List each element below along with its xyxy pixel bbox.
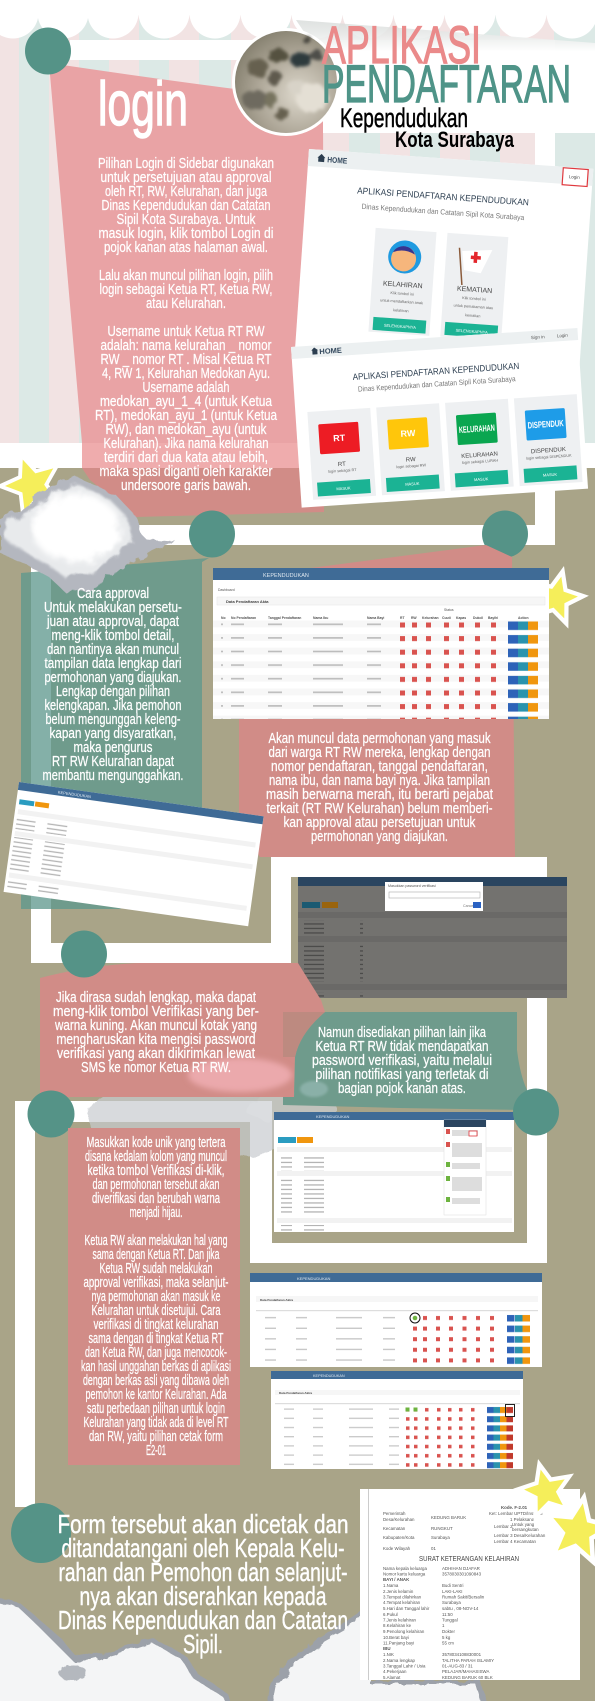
screenshot: surat keterangan kelahiran form: ADHIHAN DJAFAR <box>442 1566 480 1571</box>
text block: cara approval: dan nantinya akan muncul <box>47 641 179 658</box>
screenshot: data pendaftaran table: RT <box>400 616 405 620</box>
text block: masukkan kode: sama dengan di tingkat Ketua RT <box>88 1330 224 1347</box>
screenshot: surat keterangan kelahiran form: 5.Alamat <box>383 1675 401 1680</box>
text block: form dicetak: rahan dan Pemohon dan selanjut- <box>58 1557 348 1587</box>
card: RW: MASUK <box>405 481 420 487</box>
screenshot: surat keterangan kelahiran form: Kode. F-2.01 <box>501 1505 528 1510</box>
screenshot: surat keterangan kelahiran form: 3.Tanggal Lahir / Usia <box>383 1664 426 1668</box>
screenshot: notifikasi dropdown <box>274 1112 514 1232</box>
screenshot: surat keterangan kelahiran form: 2.Jenis kelamin <box>383 1589 414 1594</box>
text block: masukkan kode: verifikasi di tingkat kelurahan <box>94 1316 218 1333</box>
text block: masukkan kode <box>81 1134 231 1459</box>
screenshot: surat keterangan kelahiran form: Lembar 4 Kecamatan <box>494 1539 537 1544</box>
text block: masukkan kode: Masukkan kode unik yang tertera <box>86 1134 226 1151</box>
text block: form dicetak: Sipil. <box>183 1629 223 1659</box>
card: Kelurahan: KELURAHAN <box>461 452 498 460</box>
text block: masukkan kode: disana kedalam kolom yang muncul <box>85 1148 227 1165</box>
text block: form dicetak: Dinas Kependudukan dan Catatan <box>58 1605 348 1635</box>
screenshot: surat keterangan kelahiran form: Desa/Kelurahan <box>383 1517 415 1522</box>
text block: masukkan kode: dan permohonan tersebut akan <box>92 1176 220 1193</box>
text block: masukkan kode: approval verifikasi, maka selanjut- <box>84 1274 228 1291</box>
screenshot: surat keterangan kelahiran form: Budi Sentri <box>442 1583 464 1588</box>
screenshot: surat keterangan kelahiran form: Nomor kartu keluarga <box>383 1572 426 1576</box>
text block: form dicetak: Form tersebut akan dicetak dan <box>58 1509 348 1539</box>
text block: masukkan kode: Ketua RW akan melakukan hal yang <box>84 1232 228 1249</box>
card: Kelurahan: KELURAHAN <box>459 423 495 435</box>
card: Kelurahan: login sebagai LURAH <box>462 459 499 465</box>
screenshot: data pendaftaran table: No <box>221 616 226 620</box>
text block: masukkan kode: E2-01 <box>146 1442 166 1459</box>
text block: login explanation: Username adalah <box>142 379 230 396</box>
text block: form dicetak: nya akan diserahkan kepada <box>80 1581 327 1611</box>
screenshot: login role selection: Login <box>557 333 568 338</box>
text block: data permohonan: terkait (RT RW Kelurahan) belum memberi- <box>266 800 492 817</box>
screenshot: surat keterangan kelahiran form: Surabaya <box>442 1600 461 1605</box>
text block: login explanation: RW), dan medokan_ayu (untuk <box>106 421 267 438</box>
text block: masukkan kode: Kelurahan yang tidak ada di level RT <box>84 1414 228 1431</box>
screenshot: surat keterangan kelahiran form: 2.Nama lengkap <box>383 1658 416 1663</box>
card: RT: RT <box>333 433 346 443</box>
text block: login explanation: adalah: nama kelurahan _ nomor <box>100 337 272 354</box>
panel stripe over white frame <box>31 572 51 909</box>
text block: login explanation: terdiri dari dua kata atau lebih, <box>104 449 268 466</box>
screenshot: surat keterangan kelahiran form: 6.Pukul <box>383 1612 398 1617</box>
screenshot: home page with login button: HOME <box>327 155 348 166</box>
screenshot: data pendaftaran table: Data Pendaftaran Akta <box>226 599 269 604</box>
approved markers and print highlight <box>406 1404 514 1416</box>
star: right <box>519 558 594 631</box>
text block: data permohonan: dari warga RT RW mereka, lengkap dengan <box>268 744 490 761</box>
screenshot: login role selection <box>291 328 588 508</box>
screenshot: data pendaftaran table: Dukcil <box>473 616 483 620</box>
verification dialog: Masukkan password verifikasi <box>388 884 436 888</box>
text block: form dicetak: ditandatangani oleh Kepala Kelu- <box>62 1533 344 1563</box>
card: kematian <box>440 233 508 341</box>
screenshot: data pendaftaran table: Tanggal Pendaftaran <box>268 616 301 620</box>
screenshot: surat keterangan kelahiran form: 3578030301090843 <box>442 1572 482 1576</box>
card: Dispenduk <box>514 394 583 486</box>
text block: cara approval: membantu mengunggahkan. <box>42 767 184 784</box>
text block: notifikasi: Namun disediakan pilihan lain jika <box>318 1024 486 1041</box>
white band <box>0 443 595 468</box>
card: RT: RT <box>338 462 346 468</box>
header poster <box>296 20 595 133</box>
screenshot: data pendaftaran table: RW <box>411 616 417 620</box>
screenshot: surat keterangan kelahiran form: Nama kepala keluarga <box>383 1566 427 1571</box>
white frames <box>15 40 555 1507</box>
screenshot: login role selection: Dinas Kependudukan dan Catatan Sipil Kota Surabaya <box>358 374 517 394</box>
text block: masukkan kode: ketika tombol Verifikasi di-klik, <box>88 1162 224 1179</box>
screenshot: table with first approval <box>250 1273 542 1367</box>
screenshot: surat keterangan kelahiran form: 9.Penolong kelahiran <box>383 1629 425 1634</box>
screenshot: surat keterangan kelahiran form: Kabupaten/Kota <box>383 1535 415 1540</box>
notifikasi overlap on pink panel <box>283 1012 325 1057</box>
text block: masukkan kode: menjadi hijau. <box>130 1204 182 1221</box>
screenshot: surat keterangan kelahiran form: 11.Panjang bayi <box>383 1640 414 1646</box>
screenshot: surat keterangan kelahiran form: SURAT KETERANGAN KELAHIRAN <box>419 1556 519 1563</box>
screenshot: surat keterangan kelahiran form: Kecamatan <box>383 1526 406 1531</box>
screenshot: data pendaftaran table: Nama Ibu <box>313 616 328 620</box>
screenshot: surat keterangan kelahiran form: Kode Wilayah <box>383 1546 411 1551</box>
screenshot: surat keterangan kelahiran form: 8.Kelahiran ke <box>383 1623 412 1628</box>
panel: cara approval <box>21 558 209 909</box>
screenshot: surat keterangan kelahiran form: 5.Hari dan Tanggal lahir <box>383 1606 430 1611</box>
text block: cara approval: tampilan data lengkap dari <box>44 655 182 672</box>
text block: cara approval: meng-klik tombol detail, <box>52 627 174 644</box>
card: kelahiran: kelahiran <box>393 308 409 313</box>
screenshot: surat keterangan kelahiran form: 3578034108830001 <box>442 1652 482 1657</box>
text block: login explanation: pojok kanan atas halaman awal. <box>104 239 268 256</box>
text block: notifikasi: password verifikasi, yaitu melalui <box>312 1052 492 1069</box>
text block: notifikasi: Ketua RT RW tidak mendapatkan <box>316 1038 488 1055</box>
screenshot: surat keterangan kelahiran form: KEDUNG BARUK <box>431 1515 466 1520</box>
screenshot: surat keterangan kelahiran form: LAKI-LAKI <box>442 1589 462 1594</box>
text block: verifikasi: mengharuskan kita mengisi password <box>56 1031 256 1048</box>
screenshot: surat keterangan kelahiran form: Pemerintah <box>383 1511 406 1516</box>
screenshot: surat keterangan kelahiran form: Untuk yang <box>512 1522 535 1527</box>
text block: form dicetak <box>58 1509 348 1659</box>
screenshot: surat keterangan kelahiran form: Rumah Sakit/Bersalin <box>442 1594 485 1600</box>
heading: login: login <box>98 70 188 139</box>
panel: masukkan kode <box>68 1128 240 1465</box>
screenshot: data pendaftaran table: Bayihi <box>488 616 498 620</box>
screenshot: table with print button: Data Pendaftaran Aktra <box>279 1391 312 1395</box>
screenshot: table with first approval: Data Pendaftaran Aktra <box>260 1298 293 1302</box>
text block: masukkan kode: diverifikasi dan berubah warna <box>92 1190 220 1207</box>
text block: login explanation: 4, RW 1, Kelurahan Medokan Ayu. <box>102 365 270 382</box>
screenshot: notifikasi dropdown: KEPENDUDUKAN <box>316 1114 349 1119</box>
screenshot: data pendaftaran table: Cuuti <box>442 616 451 620</box>
screenshot: surat keterangan kelahiran form: bersangkutan <box>512 1527 539 1532</box>
striped awning background <box>0 15 595 443</box>
text block: cara approval: RT RW Kelurahan dapat <box>52 753 175 770</box>
text block: login explanation: RT), medokan_ayu_1 (untuk Ketua <box>95 407 278 424</box>
card: Dispenduk: login sebagai DISPENDUK <box>526 454 572 461</box>
text block: masukkan kode: dengan berkas asli yang dibawa oleh <box>83 1372 229 1389</box>
card: Kelurahan: MASUK <box>474 476 489 482</box>
text block: login explanation: Sipil Kota Surabaya. Untuk <box>116 211 256 228</box>
screenshot: table with print button: KEPENDUDUKAN <box>313 1374 345 1378</box>
text block: masukkan kode: Ketua RW sudah melakukan <box>100 1260 212 1277</box>
screenshot: login role selection: Sign in <box>531 334 545 340</box>
screenshot: surat keterangan kelahiran form: 3.Tempat dilahirkan <box>383 1594 422 1600</box>
text block: login explanation: Pilihan Login di Sidebar digunakan <box>98 155 274 172</box>
text block: masukkan kode: nya permohonan akan masuk ke <box>92 1288 220 1305</box>
text block: notifikasi <box>312 1024 492 1097</box>
text block: masukkan kode: Kelurahan untuk disetujui. Cara <box>92 1302 221 1319</box>
cloud tint in notifikasi panel <box>300 1081 328 1097</box>
screenshot: surat keterangan kelahiran form: Surabaya <box>431 1535 450 1540</box>
screenshot: login role selection: HOME <box>319 346 342 356</box>
screenshot: surat keterangan kelahiran form: IBU <box>383 1646 391 1651</box>
screenshot: data pendaftaran table: No Pendaftaran <box>231 616 256 620</box>
text block: verifikasi: warna kuning. Akan muncul kotak yang <box>54 1017 257 1034</box>
text block: masukkan kode: dan Ketua RW, dan juga mencocok- <box>85 1344 227 1361</box>
circle: frame left <box>61 930 107 978</box>
screenshot: surat keterangan kelahiran form: 4.Tempat kelahiran <box>383 1600 421 1605</box>
card: RW: RW <box>406 457 416 464</box>
card: Dispenduk: MASUK <box>543 472 558 478</box>
screenshot: surat keterangan kelahiran form: 1.Nama <box>383 1583 399 1588</box>
text block: data permohonan: nama ibu, dan nama bayi nya. Jika tampilan <box>269 772 490 789</box>
screenshot: home page with login button <box>295 149 593 368</box>
screenshot: surat keterangan kelahiran form: Lembar 2 <box>494 1524 513 1529</box>
card: kematian: Klik tombol ini <box>462 296 486 302</box>
screenshot: surat keterangan kelahiran form: 55 cm <box>442 1640 454 1646</box>
card: kematian: untuk pemakaman atau <box>453 303 493 310</box>
card: kelahiran: Klik tombol ini <box>390 291 414 297</box>
text block: login explanation: RW _ nomor RT . Misal Ketua RT <box>100 351 272 368</box>
screenshot: home page with login button: Login <box>569 174 580 180</box>
screenshot: surat keterangan kelahiran form: TALITHA PARAH ISLAMIY <box>442 1658 494 1663</box>
card: kelahiran: SELENGKAPNYA <box>384 323 416 330</box>
screenshot: data pendaftaran table: Kapas <box>456 616 466 620</box>
screenshot: surat keterangan kelahiran form: Dokter <box>442 1629 455 1634</box>
card: RW <box>376 403 445 495</box>
text block: login explanation: medokan_ayu_1_4 (untuk Ketua <box>100 393 273 410</box>
screenshot: login role selection: APLIKASI PENDAFTARAN KEPENDUDUKAN <box>352 361 520 382</box>
moon <box>232 28 340 136</box>
card: RT <box>307 408 376 500</box>
text block: cara approval: belum mengunggah keleng- <box>46 711 180 728</box>
text block: cara approval <box>42 585 184 784</box>
title: Kota Surabaya <box>395 127 515 152</box>
screenshot: surat keterangan kelahiran form: Lembar 3 Desa/Kelurahan <box>494 1533 546 1538</box>
text block: data permohonan: masih berwarna merah, itu berarti pejabat <box>266 786 494 803</box>
text block: notifikasi: bagian pojok kanan atas. <box>338 1080 466 1097</box>
screenshot: surat keterangan kelahiran form: Ket: Lembar UPTD/Instansi <box>489 1511 542 1516</box>
card: RT: login sebagai RT <box>328 468 357 474</box>
text block: cara approval: Lengkap dengan pilihan <box>56 683 170 700</box>
text block: cara approval: juan atau approval, dapat <box>46 613 180 630</box>
panel: data permohonan <box>239 545 515 857</box>
title: Kependudukan <box>340 103 468 133</box>
panel: verifikasi <box>40 963 325 1097</box>
text block: login explanation: Kelurahan). Jika nama kelurahan <box>104 435 268 452</box>
screenshot: surat keterangan kelahiran form: RUNGKUT <box>431 1526 453 1531</box>
text block: login explanation: maka spasi diganti oleh karakter <box>100 463 272 480</box>
screenshot: data pendaftaran table <box>213 568 549 719</box>
screenshot: home page with login button: Dinas Kependudukan dan Catatan Sipil Kota Surabaya <box>361 202 525 222</box>
screenshot: table with first approval: KEPENDUDUKAN <box>297 1276 330 1281</box>
screenshot: data pendaftaran table: Status <box>444 608 454 612</box>
text block: login explanation: masuk login, klik tombol Login di <box>98 225 274 242</box>
star: form top <box>508 1451 583 1524</box>
screenshot: surat keterangan kelahiran form: 4.Pekerjaan <box>383 1669 407 1674</box>
screenshot: surat keterangan kelahiran form: Tunggal <box>442 1618 458 1622</box>
card: kelahiran <box>368 228 437 336</box>
title <box>322 16 571 152</box>
cloud: upper <box>0 477 175 592</box>
approved marker <box>410 1313 420 1323</box>
title: APLIKASI <box>322 16 481 75</box>
circle: top left <box>25 28 71 74</box>
text block: data permohonan: kan approval atau persetujuan untuk <box>284 814 476 831</box>
card: RW: login sebagai RW <box>396 463 427 469</box>
card: RW: RW <box>400 428 416 439</box>
card: Dispenduk: DISPENDUK <box>527 418 564 430</box>
screenshot: table with print button <box>271 1371 523 1469</box>
star: form right <box>535 1485 595 1569</box>
panel: login <box>49 63 324 517</box>
notification dropdown <box>444 1120 486 1215</box>
text block: masukkan kode: pemohon ke kantor Kelurahan. Ada <box>86 1386 227 1403</box>
screenshot: data pendaftaran table: Action <box>518 616 529 620</box>
circle: notifikasi <box>513 1088 559 1136</box>
text block: verifikasi <box>53 989 259 1076</box>
awning scallops <box>0 0 595 38</box>
text block: masukkan kode: kan hasil unggahan berkas di aplikasi <box>81 1358 231 1375</box>
screenshot: home page with login button: APLIKASI PENDAFTARAN KEPENDUDUKAN <box>357 185 529 207</box>
text block: login explanation: atau Kelurahan. <box>146 295 226 312</box>
text block: verifikasi: meng-klik tombol Verifikasi yang ber- <box>53 1003 259 1020</box>
cloud: bottom <box>0 1595 490 1701</box>
screenshot: detail permohonan tilted <box>4 782 264 926</box>
screenshot: surat keterangan kelahiran form: 01-AUG-83 / 31 <box>442 1664 473 1668</box>
text block: login explanation: Username untuk Ketua RT RW <box>108 323 265 340</box>
text block: login explanation <box>95 155 278 494</box>
card: kelahiran: untuk mendaftarkan anak <box>380 298 423 305</box>
screenshot: surat keterangan kelahiran form: 01 <box>431 1546 436 1551</box>
text block: login explanation: oleh RT, RW, Kelurahan, dan juga <box>105 183 267 200</box>
circle: right <box>482 510 528 558</box>
text block: login explanation: undersoore garis bawah. <box>121 477 251 494</box>
text block: verifikasi: Jika dirasa sudah lengkap, maka dapat <box>56 989 257 1006</box>
text block: masukkan kode: dan RW, yaitu pilihan cetak form <box>89 1428 223 1445</box>
cloud tint in panel <box>188 1058 292 1092</box>
card: Dispenduk: DISPENDUK <box>531 447 566 455</box>
text block: verifikasi: verifikasi yang akan dikirimkan lewat <box>57 1045 256 1062</box>
screenshot: surat keterangan kelahiran form: 5 kg <box>442 1635 451 1640</box>
text block: cara approval: kelengkapan. Jika pemohon <box>44 697 182 714</box>
text block: login explanation: Lalu akan muncul pilihan login, pilih <box>99 267 273 284</box>
card: kematian: kematian <box>465 313 481 318</box>
text block: login explanation: Dinas Kependudukan dan Catatan <box>102 197 270 214</box>
circle: middle <box>189 510 235 558</box>
cloud: middle <box>88 1074 336 1162</box>
text block: notifikasi: pilihan notifikasi yang terletak di <box>316 1066 488 1083</box>
screenshot: data pendaftaran table: Dashboard <box>218 588 235 592</box>
olive lower background <box>0 468 595 1701</box>
screenshot: surat keterangan kelahiran form: 10.Berat bayi <box>383 1635 409 1640</box>
screenshot: surat keterangan kelahiran form: BAYI / ANAK <box>383 1577 410 1582</box>
screenshot: surat keterangan kelahiran form <box>360 1489 580 1680</box>
text block: masukkan kode: sama dengan Ketua RT. Dan jika <box>92 1246 220 1263</box>
screenshot: surat keterangan kelahiran form: 1 Pelaksana <box>510 1517 535 1522</box>
verification dialog: Cancel <box>463 904 474 908</box>
verification dialog <box>385 882 483 911</box>
text block: data permohonan: Akan muncul data permohonan yang masuk <box>268 730 491 747</box>
star: top left <box>0 438 75 525</box>
card: kelahiran: KELAHIRAN <box>383 280 423 290</box>
card: Kelurahan <box>445 399 514 491</box>
screenshot: surat keterangan kelahiran form: 1.NIK <box>383 1652 394 1657</box>
card: kematian: SELENGKAPNYA <box>455 328 488 335</box>
screenshot: password verification dialog <box>298 877 567 998</box>
text block: cara approval: Untuk melakukan persetu- <box>44 599 182 616</box>
text block: cara approval: kapan yang disyaratkan, <box>50 725 176 742</box>
screenshot: detail permohonan tilted: KEPENDUDUKAN <box>58 790 91 799</box>
screenshot: surat keterangan kelahiran form: 1 <box>442 1623 445 1628</box>
text block: masukkan kode: satu perbedaan pilihan untuk login <box>87 1400 225 1417</box>
screenshot: surat keterangan kelahiran form: PELAJAR/MAHASISWA <box>442 1669 489 1674</box>
screenshot: surat keterangan kelahiran form: 11:50 <box>442 1612 453 1617</box>
text block: login explanation: login sebagai Ketua RT, Ketua RW, <box>100 281 272 298</box>
text block: data permohonan: permohonan yang diajukan. <box>311 828 448 845</box>
text block: cara approval: permohonan yang diajukan. <box>44 669 182 686</box>
screenshot: data pendaftaran table: Kelurahan <box>422 616 439 620</box>
screenshot: surat keterangan kelahiran form: 7.Jenis kelahiran <box>383 1618 417 1622</box>
text block: cara approval: Cara approval <box>77 585 149 602</box>
panel: notifikasi <box>283 1012 527 1110</box>
screenshot: surat keterangan kelahiran form: sabtu , 08-NOV-14 <box>442 1606 479 1611</box>
circle: bottom <box>11 1503 71 1563</box>
screenshot: surat keterangan kelahiran form: KEDUNG BARUK 60 BLK <box>442 1675 493 1680</box>
screenshot: data pendaftaran table: Nama Bayi <box>367 616 384 620</box>
text block: login explanation: untuk persetujuan atau approval <box>100 169 272 186</box>
card: RT: MASUK <box>336 485 351 491</box>
text block: data permohonan <box>266 730 494 845</box>
text block: data permohonan: nomor pendaftaran, tanggal pendaftaran, <box>271 758 488 775</box>
text block: cara approval: maka pengurus <box>74 739 152 756</box>
text block: verifikasi: SMS ke nomor Ketua RT RW. <box>81 1059 231 1076</box>
screenshot: data pendaftaran table: KEPENDUDUKAN <box>263 573 309 579</box>
circle: lower left <box>28 1090 74 1138</box>
card: kematian: KEMATIAN <box>457 286 492 295</box>
